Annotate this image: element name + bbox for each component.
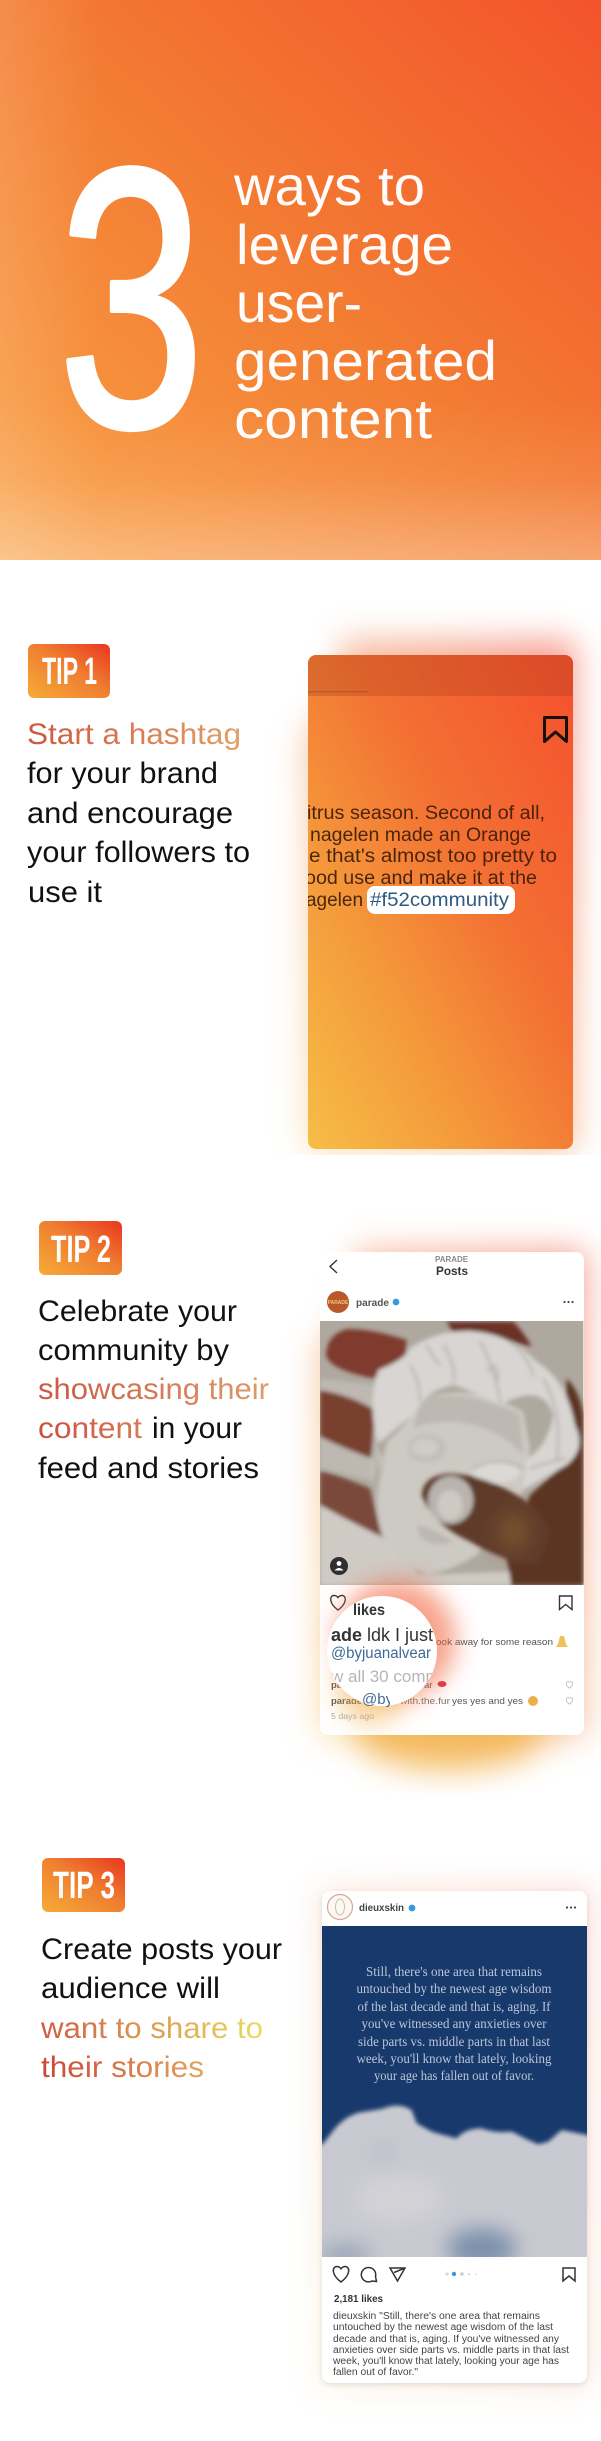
title: content — [234, 387, 432, 450]
profile row — [328, 1894, 576, 1920]
tip 1 badge — [28, 644, 110, 698]
likes and caption — [332, 2293, 569, 2378]
big numeral 3: 3 — [58, 92, 205, 505]
panel: tip 2 — [38, 1125, 586, 1770]
tip 1 text: your followers to — [27, 836, 250, 869]
photo: quote over sky and clouds: your age has fallen out of favor. — [374, 2069, 534, 2084]
caption text — [305, 803, 557, 911]
tip 3 text: want to share to — [40, 2012, 263, 2045]
photo: quote over sky and clouds — [322, 1926, 587, 2257]
photo: hand holding plaster head — [320, 1321, 583, 1586]
panel: tip 3 — [40, 1858, 601, 2388]
tip 1 text: use it — [28, 876, 103, 909]
tip 2 text — [38, 1295, 269, 1485]
likes and caption: anxieties over side parts vs. middle parts in that last — [333, 2345, 569, 2356]
tip 2 badge: TIP 2 — [51, 1229, 111, 1271]
photo: quote over sky and clouds: side parts vs. middle parts in that last — [358, 2035, 550, 2050]
icon: back chevron — [330, 1260, 337, 1273]
likes and caption: fallen out of favor." — [333, 2367, 419, 2378]
tip 2 card: PARADE — [435, 1255, 469, 1264]
tip 2 text: Celebrate your — [38, 1295, 237, 1328]
tip 3 glow — [318, 1888, 591, 2388]
tip 1 card — [305, 655, 573, 1149]
title: ways to — [233, 154, 425, 217]
title: user- — [236, 271, 362, 334]
tip 2 text: community by — [38, 1334, 229, 1367]
caption text: ood use and make it at the — [305, 868, 537, 889]
caption text: e that's almost too pretty to — [309, 846, 557, 867]
title — [233, 154, 497, 450]
tip 1 badge: TIP 1 — [42, 651, 97, 693]
magnifier glow — [336, 1580, 456, 1725]
post actions and comments: 5 days ago — [331, 1711, 374, 1721]
caption text: nagelen made an Orange — [310, 825, 531, 846]
magnifier circle: ade ldk I just c — [331, 1625, 447, 1645]
tip 3 text: audience will — [41, 1972, 220, 2005]
post actions and comments — [331, 1595, 573, 1721]
tip 3 badge — [42, 1858, 125, 1912]
panel: tip 1 — [27, 550, 576, 1152]
tip 2 badge — [39, 1221, 122, 1275]
photo: quote over sky and clouds: week, you'll know that lately, looking — [356, 2052, 552, 2067]
tip 1 text: Start a hashtag — [27, 718, 241, 751]
post actions and comments: parade — [331, 1696, 362, 1707]
magnifier circle: likes — [353, 1602, 385, 1619]
photo: quote over sky and clouds: untouched by the newest age wisdom — [356, 1982, 552, 1997]
post actions and comments: yes yes and yes — [452, 1696, 523, 1707]
profile row: parade — [356, 1297, 389, 1309]
likes and caption: week, you'll know that lately, looking your age has — [332, 2356, 559, 2367]
tip 2 text: in your — [152, 1412, 242, 1445]
photo: quote over sky and clouds: of the last decade and that is, aging. If — [358, 2000, 551, 2015]
panel: header — [0, 0, 601, 560]
tip 3 text — [40, 1933, 282, 2084]
photo: quote over sky and clouds: you've witnessed any anxieties over — [362, 2017, 547, 2032]
profile row: PARADE — [328, 1300, 349, 1306]
magnifier circle — [327, 1596, 447, 1708]
tip 2 text: showcasing their — [38, 1373, 269, 1406]
tip 3 text: their stories — [41, 2051, 204, 2084]
tip 2 glow — [298, 1228, 601, 1793]
post actions and comments: ar — [424, 1680, 432, 1691]
caption text: agelen — [306, 890, 363, 911]
tip 3 text: Create posts your — [41, 1933, 282, 1966]
likes and caption: untouched by the newest age wisdom of the last — [333, 2322, 553, 2333]
magnifier circle: @byjuanalvear — [331, 1645, 431, 1662]
tip 2 text: content — [38, 1412, 143, 1445]
icon: bookmark — [544, 718, 566, 742]
icon: user tag — [330, 1557, 348, 1575]
likes and caption: dieuxskin "Still, there's one area that remains — [333, 2311, 540, 2322]
profile row: dieuxskin — [359, 1902, 404, 1914]
tip 1 glow — [286, 618, 598, 1155]
likes and caption: decade and that is, aging. If you've witnessed any — [333, 2334, 559, 2345]
post actions and comments: pa — [331, 1680, 343, 1691]
post actions and comments: ook away for some reason — [436, 1637, 553, 1648]
icon row: like, comment, share, save — [333, 2266, 575, 2282]
tip 2 text: feed and stories — [38, 1452, 259, 1485]
magnifier circle: w all 30 comm — [330, 1667, 440, 1686]
tip 3 card — [322, 1891, 587, 2383]
profile row — [327, 1291, 574, 1313]
hashtag pill — [367, 886, 515, 914]
post actions and comments: with.the.fur — [399, 1696, 450, 1707]
hashtag pill: #f52community — [370, 890, 510, 911]
tip 2 card — [320, 1252, 584, 1735]
title: leverage — [236, 213, 453, 276]
tip 3 badge: TIP 3 — [53, 1865, 115, 1907]
caption text: itrus season. Second of all, — [307, 803, 545, 824]
photo: quote over sky and clouds: Still, there's one area that remains — [366, 1965, 542, 1980]
likes and caption: 2,181 likes — [334, 2293, 383, 2305]
tip 1 text: and encourage — [27, 797, 233, 830]
title: generated — [234, 329, 497, 392]
tip 1 text — [27, 718, 250, 909]
tip 1 text: for your brand — [27, 757, 218, 790]
magnifier circle: @byju — [362, 1691, 405, 1708]
carousel dots — [445, 2272, 477, 2276]
tip 2 card: Posts — [436, 1266, 468, 1278]
